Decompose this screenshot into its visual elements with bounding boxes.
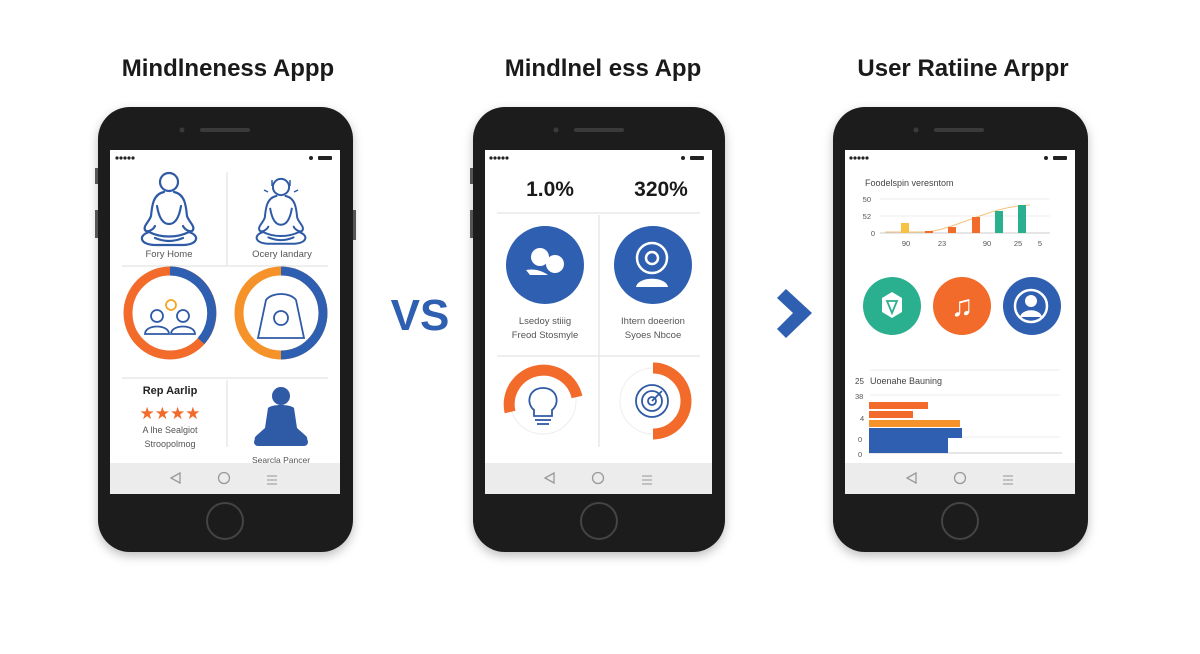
rating block: Rep Aarlip	[143, 385, 198, 397]
horizontal bar chart: 25	[855, 377, 864, 386]
line/bar chart: Foodelspin veresntom	[865, 178, 954, 188]
labels row 1: Fory Home	[146, 249, 192, 260]
phone 1: Searcla Pancer	[252, 455, 310, 465]
horizontal bar chart: 4	[860, 414, 864, 423]
phone 1: Ocery Iandary	[252, 249, 312, 260]
icon: blue user	[1003, 277, 1061, 335]
nav bar	[110, 463, 340, 494]
phone 2	[470, 107, 725, 552]
rating block: A lhe Sealgiot	[142, 425, 198, 435]
VS: VS	[391, 291, 449, 340]
horizontal bar chart: Uoenahe Bauning	[870, 376, 942, 386]
labels: Lsedoy stiiig	[519, 316, 571, 327]
rating block: Stroopolmog	[144, 439, 196, 449]
donut 2	[239, 271, 323, 355]
line/bar chart: 23	[938, 239, 946, 248]
icon: blue circle target person	[614, 226, 692, 304]
icon: orange music	[933, 277, 991, 335]
donut 1	[128, 271, 212, 355]
phone 1	[95, 107, 356, 552]
phone 2: Syoes Nbcoe	[625, 330, 681, 341]
phone 3	[833, 107, 1088, 552]
title: middle: Mindlnel ess App	[505, 55, 701, 82]
line/bar chart: 5	[1038, 239, 1042, 248]
rating block: ★★★★	[140, 404, 200, 423]
line/bar chart: 50	[863, 195, 871, 204]
icon: green leaf	[863, 277, 921, 335]
title: right: User Ratiine Arppr	[857, 55, 1069, 82]
line/bar chart: 90	[983, 239, 991, 248]
phone 2: Ihtern doeerion	[621, 316, 685, 327]
icon: orange music: ♫	[951, 290, 973, 323]
icon: meditating person	[142, 173, 196, 245]
line/bar chart	[863, 178, 1050, 248]
horizontal bar chart: 38	[855, 392, 863, 401]
status bar	[115, 156, 332, 160]
stat: 320%: 320%	[634, 178, 688, 201]
line/bar chart: 52	[863, 212, 871, 221]
line/bar chart: 0	[871, 229, 875, 238]
rating block	[140, 385, 200, 449]
title: left: Mindlneness Appp	[122, 55, 334, 82]
horizontal bar chart: 0	[858, 450, 862, 459]
line/bar chart: 90	[902, 239, 910, 248]
gauge: lightbulb	[509, 368, 577, 434]
icon: blue circle people	[506, 226, 584, 304]
stat: 1.0%: 1.0%	[526, 178, 574, 201]
gauge: target	[620, 368, 686, 434]
horizontal bar chart	[855, 370, 1062, 459]
icon: meditating person with sparkles	[257, 179, 305, 244]
icon: filled meditating person	[254, 387, 308, 446]
horizontal bar chart: 0	[858, 435, 862, 444]
phone 2: Freod Stosmyle	[512, 330, 578, 341]
line/bar chart: 25	[1014, 239, 1022, 248]
arrow: chevron	[777, 289, 812, 338]
